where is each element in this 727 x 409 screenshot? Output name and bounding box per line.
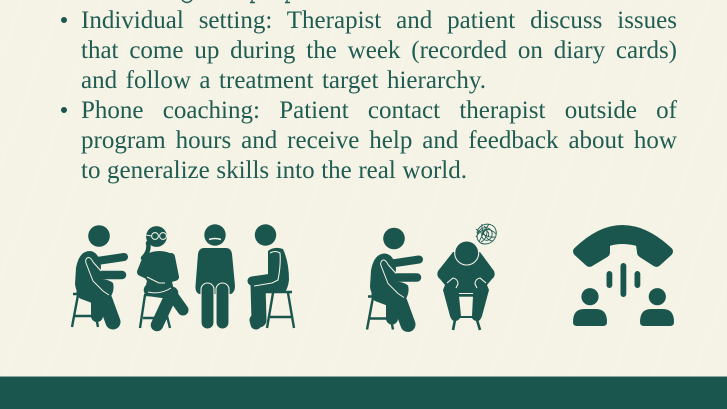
icon: therapist with distressed patient	[367, 224, 496, 330]
icon: phone coaching	[573, 226, 674, 326]
icon: sad patient, front view	[195, 224, 235, 329]
icon: therapist and patient group	[72, 224, 294, 329]
icon: tangled thought scribble	[476, 224, 496, 244]
clipped descenders of the preceding text line	[182, 0, 290, 2]
text block: individual setting: Individual setting: Therapist and patient discuss issues	[81, 7, 677, 34]
bullet: phone coaching	[61, 107, 67, 113]
footer band	[0, 376, 727, 409]
icon: woman with glasses, legs crossed	[140, 226, 183, 328]
text block: phone coaching: to generalize skills into the real world.	[81, 157, 467, 184]
text block: individual setting: and follow a treatment target hierarchy.	[81, 67, 486, 94]
icon: seated patient, side view	[252, 224, 294, 328]
icon: slumped patient	[437, 224, 496, 330]
icon: seated therapist	[367, 228, 419, 330]
text block: individual setting	[81, 7, 677, 94]
icon: seated therapist	[72, 225, 124, 327]
text block: phone coaching: Phone coaching: Patient contact therapist outside of	[81, 97, 677, 124]
bullet: individual setting	[61, 17, 67, 23]
icon: left person	[573, 288, 607, 326]
text block: phone coaching	[81, 97, 677, 184]
icon: telephone handset	[574, 226, 672, 266]
text block: phone coaching: program hours and receive help and feedback about how	[81, 127, 677, 154]
icon: right person	[640, 288, 674, 326]
icon: voice bars	[606, 263, 640, 297]
text block: individual setting: that come up during the week (recorded on diary cards)	[81, 37, 677, 64]
